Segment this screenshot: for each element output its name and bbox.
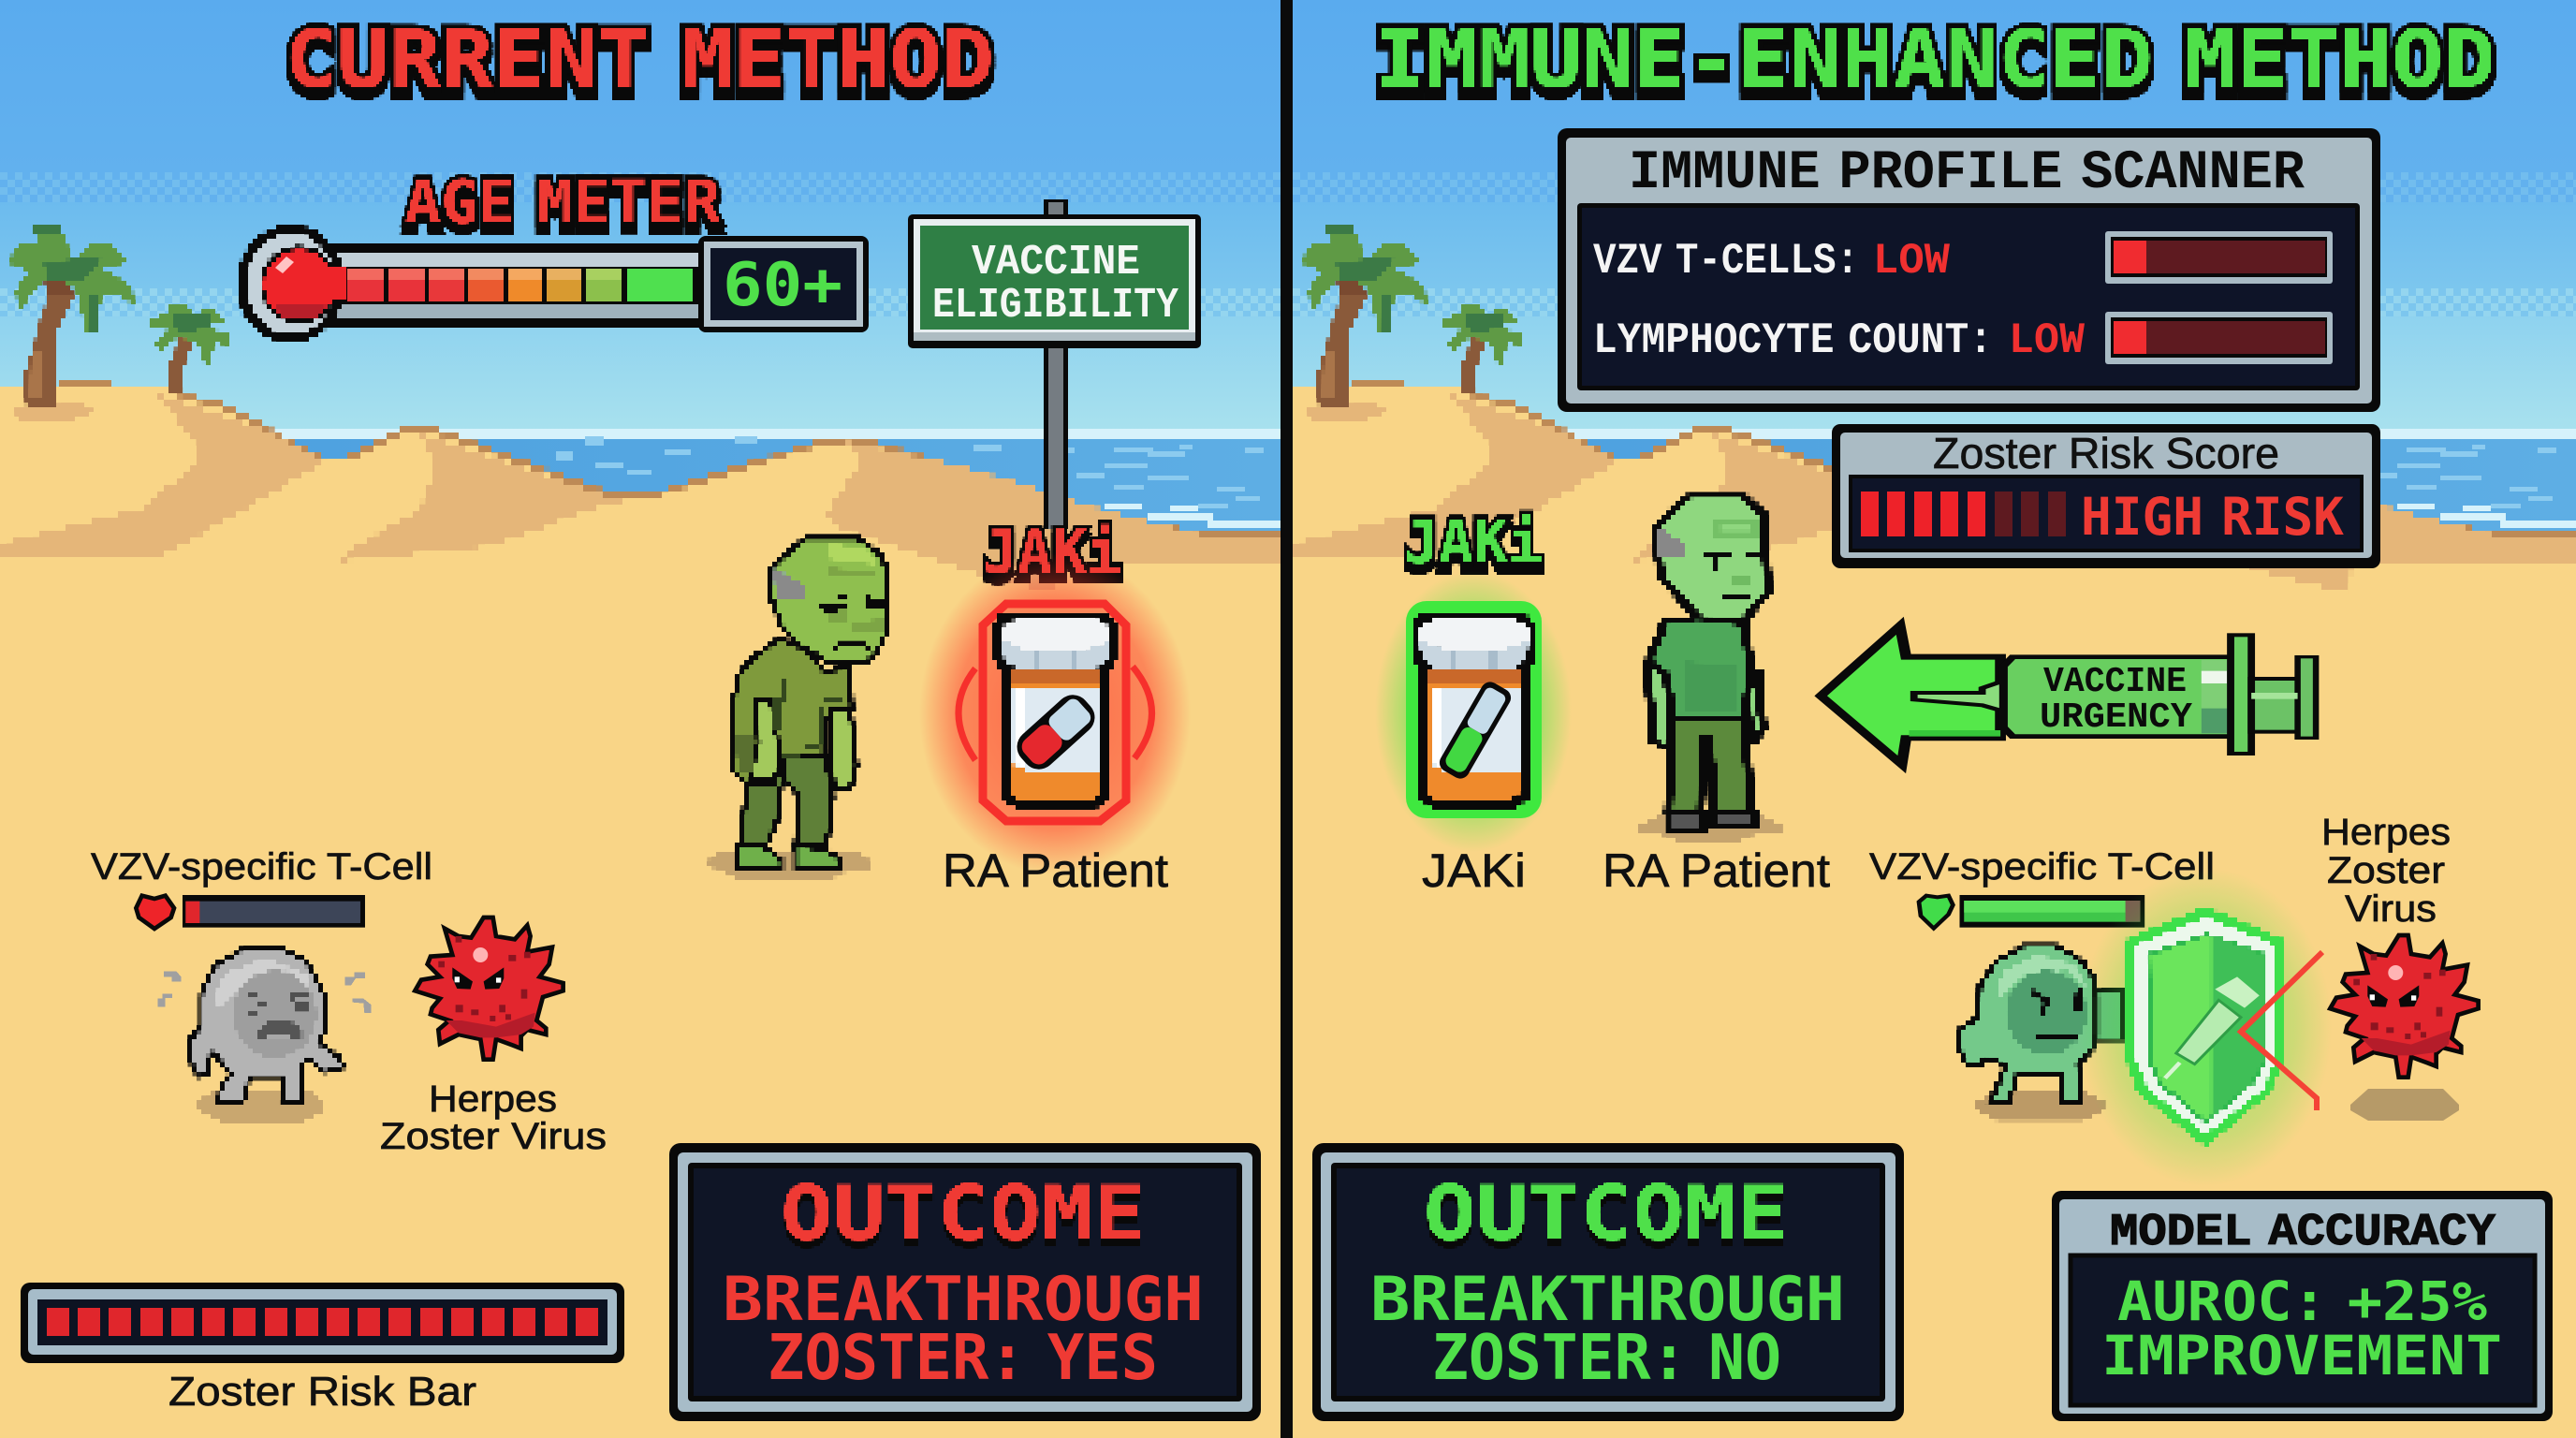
row: lymphocyte count low: LOW: [2009, 316, 2085, 365]
readout: 60+: 60+: [723, 251, 842, 320]
title: current method: CURRENT METHOD: [285, 13, 994, 107]
row: VZV T-cells low: VZV T-CELLS:: [1593, 237, 1859, 286]
virus: herpes zoster left: [415, 917, 564, 1060]
AUROC result: [2101, 1269, 2502, 1387]
bottle art: [1412, 611, 1535, 810]
sign: vaccine eligibility: ELIGIBILITY: [932, 282, 1178, 330]
label: Herpes Zoster Virus left: [380, 1078, 607, 1157]
title: immune-enhanced method: IMMUNE-ENHANCED METHOD: [1374, 13, 2496, 107]
heading: JAKi right: JAKi: [1404, 508, 1543, 578]
panel: outcome right: [1312, 1143, 1904, 1421]
heading: age meter: AGE METER: [404, 169, 721, 238]
panel: outcome left: [669, 1143, 1261, 1421]
readout: 60+: [698, 236, 869, 332]
sign: vaccine eligibility: [908, 199, 1201, 529]
character: RA patient right: [1639, 496, 1781, 841]
label: Herpes Zoster Virus left: Herpes: [429, 1078, 557, 1120]
pill: [1010, 688, 1102, 776]
shield body: [2126, 906, 2283, 1147]
outcome result: ZOSTER: NO: [1432, 1321, 1781, 1394]
outcome result: ZOSTER: YES: [768, 1321, 1158, 1394]
label: VZV-specific T-Cell right: VZV-specific T-Cell: [1869, 846, 2215, 888]
panel: zoster risk score: HIGH RISK: [2081, 487, 2344, 547]
green outline: [1406, 601, 1542, 818]
character: strong green T-cell: [1959, 946, 2124, 1121]
AUROC result: AUROC: +25%: [2117, 1269, 2487, 1333]
panel: model accuracy: MODEL ACCURACY: [2110, 1208, 2496, 1258]
panel: model accuracy: [2052, 1191, 2553, 1421]
center divider: [1281, 0, 1293, 1438]
AUROC result: IMPROVEMENT: [2101, 1324, 2502, 1387]
red barrier crack: [2241, 952, 2322, 1110]
row: lymphocyte count low: [1593, 312, 2333, 365]
syringe: vaccine urgency: URGENCY: [2040, 697, 2192, 738]
health: T-cell strong: [1919, 895, 2144, 929]
panel: zoster risk score: [1832, 424, 2380, 568]
green glow: [1375, 571, 1572, 852]
label: VZV-specific T-Cell left: VZV-specific T-Cell: [91, 846, 432, 888]
label: Zoster Risk Bar: Zoster Risk Bar: [168, 1369, 476, 1415]
thermometer: age meter: [237, 225, 711, 343]
bar: zoster risk: [21, 1283, 624, 1363]
panel: current method background: [0, 0, 1288, 1438]
outcome result: [723, 1265, 1204, 1394]
panel: zoster risk score: Zoster Risk Score: [1933, 429, 2279, 477]
glow: [919, 552, 1191, 874]
shield glow: [2079, 868, 2332, 1186]
outcome heading: OUTCOME: [781, 1170, 1146, 1258]
virus: herpes zoster right: [2330, 935, 2479, 1078]
health: T-cell low: [136, 895, 365, 929]
syringe: vaccine urgency: [1914, 635, 2316, 754]
label: Herpes Zoster Virus right: Zoster: [2327, 850, 2445, 891]
syringe: vaccine urgency: VACCINE: [2043, 662, 2187, 702]
arrow: vaccine urgency: [1821, 625, 2000, 765]
panel: immune profile scanner: [1558, 128, 2380, 412]
label: JAKi right: JAKi: [1422, 844, 1526, 897]
shake marks: [157, 971, 372, 1013]
shield: vaccine protection: [2079, 868, 2332, 1186]
row: VZV T-cells low: [1593, 231, 2333, 286]
label: Herpes Zoster Virus right: Herpes: [2321, 812, 2451, 853]
label: Herpes Zoster Virus right: Virus: [2345, 888, 2437, 930]
outcome result: BREAKTHROUGH: [723, 1265, 1204, 1335]
character: aged RA patient: [709, 538, 887, 880]
sign: vaccine eligibility: VACCINE: [972, 239, 1140, 286]
label: Herpes Zoster Virus left: Zoster Virus: [380, 1116, 607, 1157]
label: RA Patient right: RA Patient: [1603, 844, 1830, 897]
outcome heading: OUTCOME: [1424, 1170, 1789, 1258]
heading: JAKi left: JAKi: [983, 519, 1121, 588]
syringe emblem: [2165, 976, 2260, 1078]
risk segments: [1861, 492, 2066, 536]
outcome result: [1370, 1265, 1845, 1394]
panel: immune profile scanner: IMMUNE PROFILE SCANNER: [1629, 143, 2305, 204]
outcome result: BREAKTHROUGH: [1370, 1265, 1845, 1335]
bottle: JAKi green protected: [1375, 571, 1572, 852]
green pill: [1436, 679, 1515, 782]
motion arcs: [959, 667, 1152, 760]
shadow: virus right: [2350, 1089, 2459, 1121]
bottle body: [994, 611, 1117, 810]
bottle: JAKi red alert: [919, 552, 1191, 874]
row: lymphocyte count low: LYMPHOCYTE COUNT:: [1593, 316, 1993, 365]
label: Herpes Zoster Virus right: [2321, 812, 2451, 930]
row: VZV T-cells low: LOW: [1873, 237, 1950, 286]
character: weak grey T-cell: [190, 947, 344, 1122]
label: RA Patient left: RA Patient: [943, 844, 1168, 897]
panel: immune-enhanced method background: [1288, 0, 2576, 1438]
red bottle outline: [983, 604, 1126, 821]
